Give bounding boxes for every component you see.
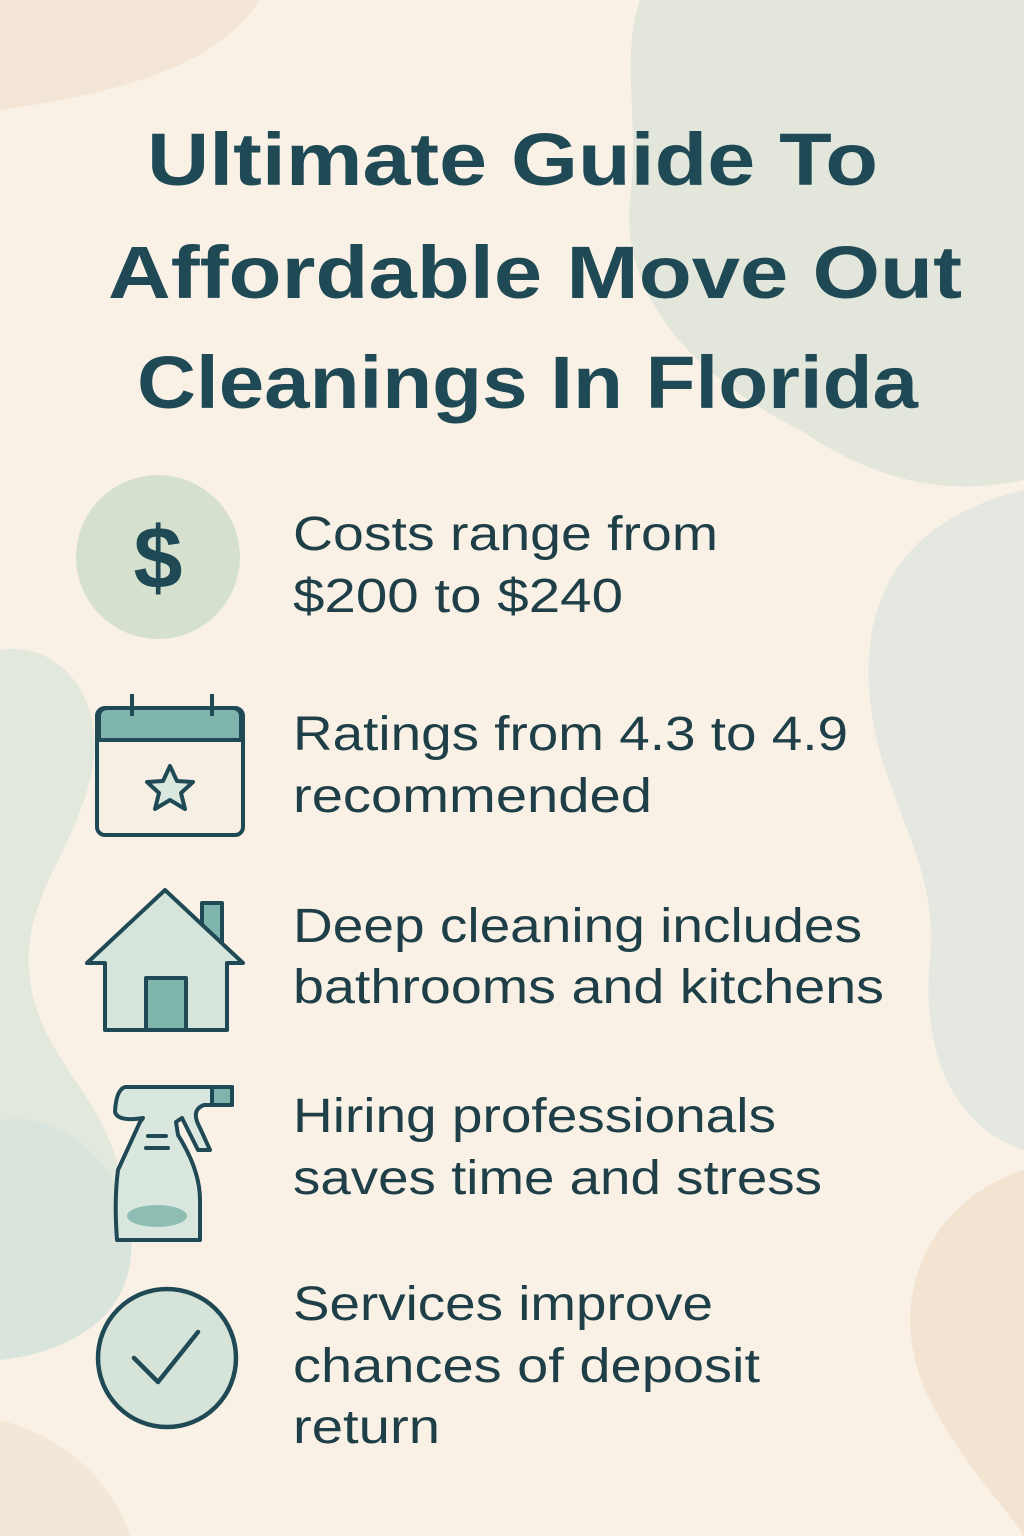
item 3: deep cleaning xyxy=(87,890,884,1030)
text: deep cleaning: bathrooms and kitchens xyxy=(293,961,884,1014)
text: ratings xyxy=(293,708,848,823)
title: Ultimate Guide To xyxy=(147,118,878,201)
icon: dollar: $ xyxy=(134,508,182,607)
text: ratings: Ratings from 4.3 to 4.9 xyxy=(293,708,848,761)
text: costs: $200 to $240 xyxy=(293,570,623,623)
text: deep cleaning: Deep cleaning includes xyxy=(293,900,862,953)
text: costs: Costs range from xyxy=(293,508,718,561)
text: services xyxy=(293,1278,760,1454)
item 2: ratings xyxy=(97,694,848,835)
icon: house xyxy=(87,890,243,1030)
text: costs xyxy=(293,508,718,623)
text: services: chances of deposit xyxy=(293,1340,760,1393)
text: deep cleaning xyxy=(293,900,884,1014)
text: hiring xyxy=(293,1090,822,1205)
item 1: costs xyxy=(76,475,718,639)
item 5: deposit return xyxy=(98,1278,760,1454)
text: ratings: recommended xyxy=(293,770,652,823)
icon: dollar xyxy=(76,475,240,639)
icon: check circle xyxy=(98,1289,236,1427)
text: services: Services improve xyxy=(293,1278,713,1331)
title: Affordable Move Out xyxy=(108,231,962,314)
text: hiring: saves time and stress xyxy=(293,1152,822,1205)
item 4: hiring professionals xyxy=(115,1087,822,1240)
text: services: return xyxy=(293,1401,440,1454)
title xyxy=(108,118,962,424)
icon: spray bottle xyxy=(115,1087,232,1240)
title: Cleanings In Florida xyxy=(137,341,919,424)
text: hiring: Hiring professionals xyxy=(293,1090,776,1143)
icon: calendar star xyxy=(97,694,243,835)
